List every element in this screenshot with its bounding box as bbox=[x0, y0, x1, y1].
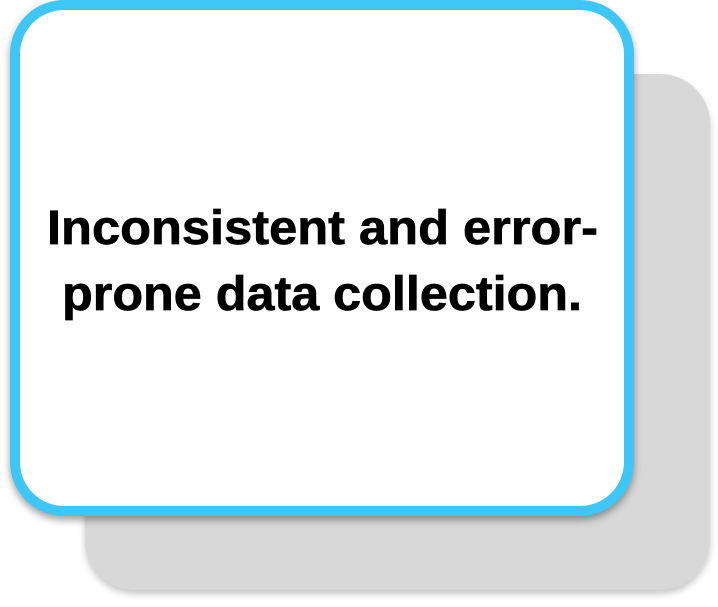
panel: blue outlined front card bbox=[10, 0, 634, 516]
heading text: Inconsistent and error- bbox=[47, 202, 598, 255]
panel: grey back card bbox=[85, 74, 710, 590]
heading text: prone data collection. bbox=[62, 268, 582, 321]
